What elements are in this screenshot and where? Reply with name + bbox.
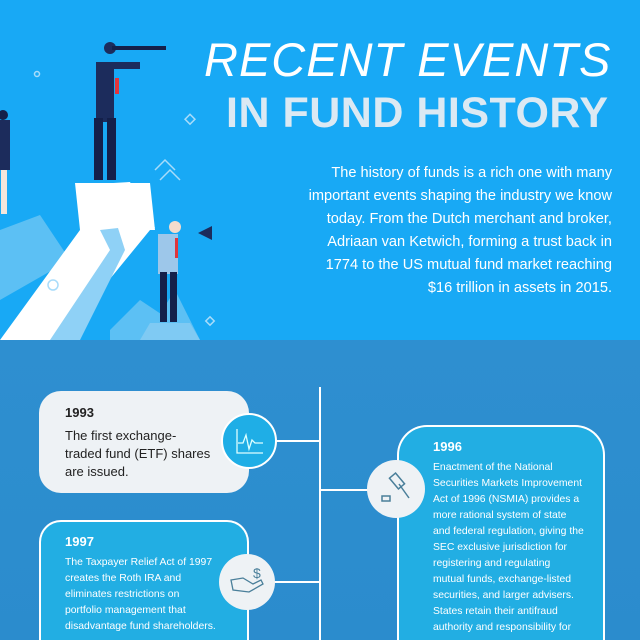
subtitle: IN FUND HISTORY: [226, 89, 609, 137]
panel: timeline: [0, 340, 640, 640]
event 1996: 1996: [433, 439, 462, 454]
event 1993: [39, 391, 249, 493]
event 1996: securities, and larger advisers.: [433, 590, 574, 601]
event 1996: Act of 1996 (NSMIA) provides a: [433, 494, 579, 505]
intro paragraph: important events shaping the industry we know: [309, 188, 612, 204]
event 1996: authority and responsibility for: [433, 622, 571, 633]
event 1997: The Taxpayer Relief Act of 1997: [65, 557, 212, 568]
event 1993: 1993: [65, 405, 94, 420]
title: RECENT EVENTS: [204, 33, 611, 86]
intro paragraph: today. From the Dutch merchant and broker,: [327, 211, 612, 227]
icon: gavel: [367, 460, 425, 518]
event 1997: disadvantage fund shareholders.: [65, 621, 216, 632]
intro paragraph: [309, 165, 612, 296]
event 1996: mutual funds, exchange-listed: [433, 574, 571, 585]
event 1996: more rational system of state: [433, 510, 566, 521]
intro paragraph: The history of funds is a rich one with many: [331, 165, 612, 181]
event 1996: States retain their antifraud: [433, 606, 558, 617]
icon: hand with dollar: $: [253, 565, 261, 581]
intro paragraph: Adriaan van Ketwich, forming a trust back in: [327, 234, 612, 250]
event 1997: [39, 520, 249, 640]
event 1996: Securities Markets Improvement: [433, 478, 582, 489]
icon: hand with dollar: [219, 554, 275, 610]
event 1997: creates the Roth IRA and: [65, 573, 181, 584]
event 1997: eliminates restrictions on: [65, 589, 179, 600]
intro paragraph: $16 trillion in assets in 2015.: [428, 280, 612, 296]
event 1996: SEC exclusive jurisdiction for: [433, 542, 567, 553]
event 1993: The first exchange-: [65, 428, 176, 443]
intro paragraph: 1774 to the US mutual fund market reaching: [326, 257, 612, 273]
timeline line: [274, 387, 368, 640]
illustration: businesspeople on arrows: [0, 42, 216, 340]
event 1997: 1997: [65, 534, 94, 549]
event 1996: and federal regulation, giving the: [433, 526, 584, 537]
event 1993: are issued.: [65, 464, 129, 479]
event 1996: [397, 425, 605, 640]
panel: header: [0, 0, 640, 340]
event 1996: registering and regulating: [433, 558, 550, 569]
event 1996: Enactment of the National: [433, 462, 553, 473]
event 1997: portfolio management that: [65, 605, 186, 616]
icon: heartbeat chart: [221, 413, 277, 469]
event 1993: traded fund (ETF) shares: [65, 446, 210, 461]
